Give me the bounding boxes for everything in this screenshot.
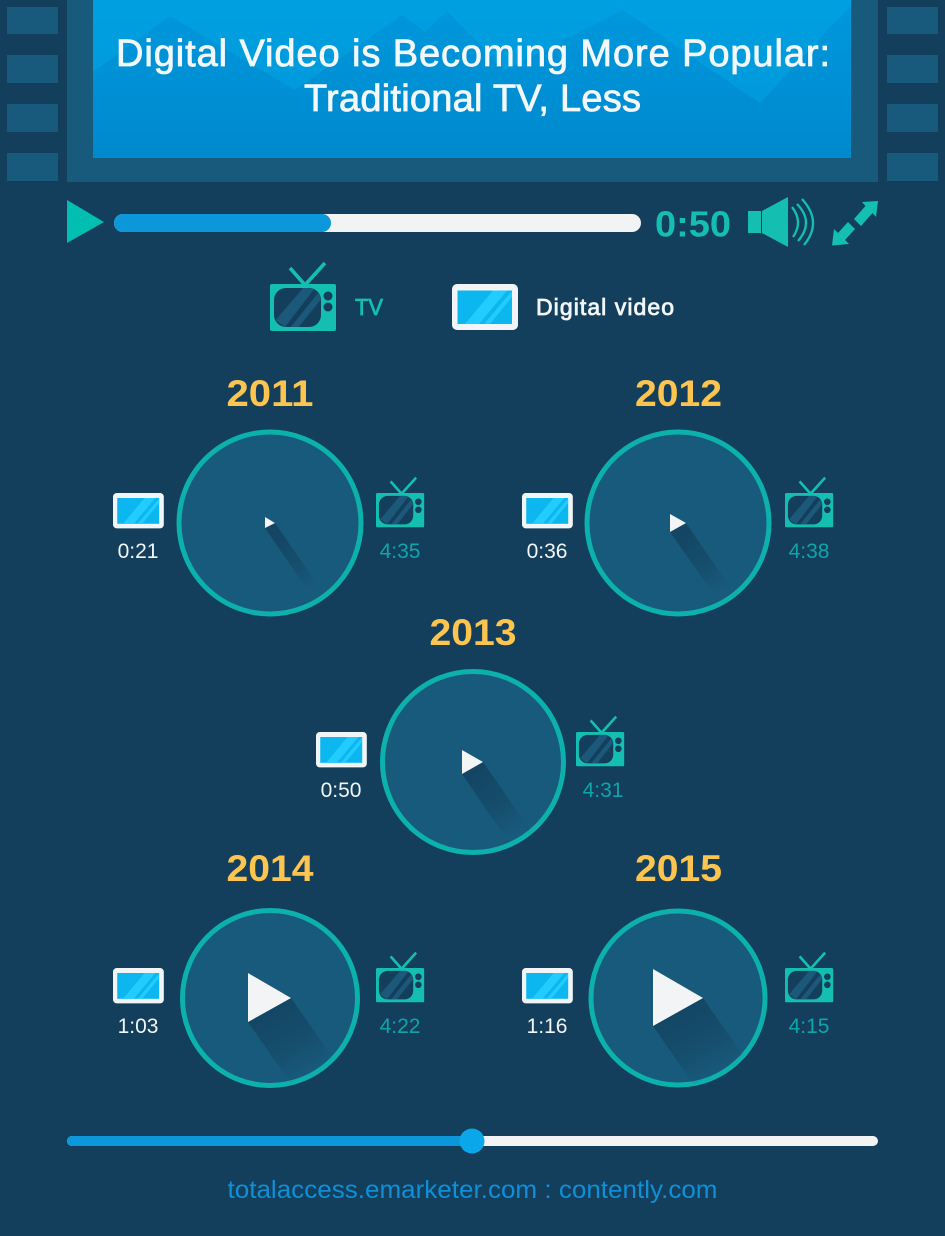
icon: TV legend bbox=[270, 263, 336, 331]
source line: totalaccess.emarketer.com : contently.com bbox=[228, 1176, 718, 1204]
digital video time: 1:16 bbox=[527, 1015, 567, 1038]
video frame bbox=[67, 0, 878, 182]
title: Digital Video is Becoming More Popular: bbox=[116, 33, 830, 75]
panel: 2014 bbox=[113, 848, 424, 1086]
icon: digital video bbox=[522, 968, 573, 1003]
digital video time: 0:50 bbox=[321, 779, 361, 802]
legend bbox=[270, 263, 674, 331]
play disc bbox=[382, 672, 564, 852]
icon: digital video bbox=[113, 968, 164, 1003]
year heading: 2013 bbox=[430, 612, 516, 653]
film strip: right perforations bbox=[887, 7, 938, 181]
elapsed time: 0:50 bbox=[655, 204, 731, 244]
title: Traditional TV, Less bbox=[304, 78, 641, 120]
timeline slider bbox=[67, 1128, 878, 1154]
play disc bbox=[182, 910, 358, 1086]
digital video time: 0:36 bbox=[527, 540, 567, 563]
icon: TV bbox=[785, 953, 833, 1002]
icon: TV bbox=[785, 478, 833, 527]
player controls bbox=[67, 197, 878, 247]
icon: digital video bbox=[316, 732, 367, 767]
film strip: left perforations bbox=[7, 7, 58, 181]
panel: 2011 bbox=[113, 373, 424, 614]
year heading: 2015 bbox=[635, 848, 722, 889]
TV time: 4:31 bbox=[583, 779, 623, 802]
icon: TV bbox=[376, 478, 424, 527]
TV time: 4:22 bbox=[380, 1015, 420, 1038]
title bbox=[116, 33, 830, 120]
digital video time: 1:03 bbox=[118, 1015, 158, 1038]
icon: speaker bbox=[748, 197, 813, 247]
TV time: 4:35 bbox=[380, 540, 420, 563]
play disc bbox=[179, 432, 361, 614]
year heading: 2014 bbox=[226, 848, 314, 889]
panel: 2013 bbox=[316, 612, 624, 852]
TV time: 4:15 bbox=[789, 1015, 829, 1038]
icon: digital video legend bbox=[452, 284, 518, 330]
progress bar bbox=[114, 214, 641, 232]
icon: fullscreen arrow bbox=[832, 201, 878, 246]
digital video time: 0:21 bbox=[118, 540, 158, 563]
icon: play button bbox=[67, 200, 104, 243]
icon: TV bbox=[576, 717, 624, 766]
play disc bbox=[591, 911, 765, 1085]
icon: digital video bbox=[522, 493, 573, 528]
video screen with mountains bbox=[93, 0, 851, 158]
icon: digital video bbox=[113, 493, 164, 528]
panel: 2015 bbox=[522, 848, 833, 1085]
year heading: 2011 bbox=[226, 373, 314, 414]
TV time: 4:38 bbox=[789, 540, 829, 563]
play disc bbox=[587, 432, 769, 614]
icon: TV bbox=[376, 953, 424, 1002]
legend label: digital video: Digital video bbox=[536, 294, 674, 320]
panel: 2012 bbox=[522, 373, 833, 614]
year heading: 2012 bbox=[635, 373, 722, 414]
legend label: TV: TV bbox=[355, 294, 384, 320]
